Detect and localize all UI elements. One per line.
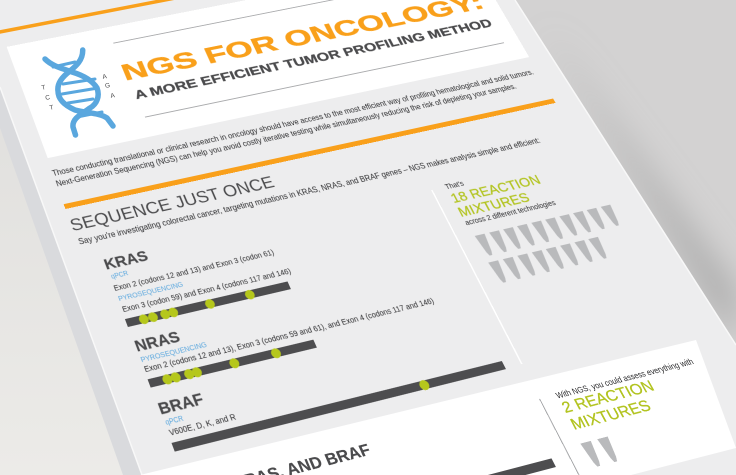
BRAF bar with mutation dot (171, 361, 506, 452)
KRAS qPCR text: Exon 2 (codons 12 and 13) and Exon 3 (codon 61) (113, 249, 276, 293)
mixtures headline: MIXTURES (567, 396, 654, 433)
NRAS heading: NRAS (132, 328, 182, 355)
header lower line (145, 42, 504, 118)
tubes: 18 reaction mixtures (474, 204, 619, 283)
section heading: SEQUENCE JUST ONCE (67, 173, 277, 235)
NRAS pyrosequencing label: PYROSEQUENCING (139, 340, 208, 364)
technologies note: across 2 different technologies (463, 199, 557, 227)
BRAF qPCR label: qPCR (164, 414, 185, 427)
intro text line 1: Those conducting translational or clinical research in oncology should have access to the most efficient way of profiling hematological and solid tumors. (51, 68, 535, 178)
KRAS pyrosequencing text: Exon 3 (codon 59) and Exon 4 (codons 117 and 146) (121, 267, 293, 314)
callout: 18 reaction mixtures (444, 172, 557, 227)
NRAS text: Exon 2 (codons 12 and 13), Exon 3 (codons 59 and 61), and Exon 4 (codons 117 and 146) (143, 297, 436, 374)
2 reaction headline: 2 REACTION (558, 377, 657, 416)
18 reaction headline: 18 REACTION (448, 172, 543, 206)
header panel (7, 0, 529, 158)
lead-in: That's (444, 180, 465, 191)
subtitle: A MORE EFFICIENT TUMOR PROFILING METHOD (132, 16, 495, 102)
lower panel bar (211, 458, 556, 475)
mixtures headline: MIXTURES (455, 190, 532, 220)
header upper line (113, 0, 464, 44)
icon: DNA helix with base letters: A (102, 73, 108, 81)
icon: DNA helix with base letters: C (45, 94, 51, 102)
BRAF text: V600E, D, K, and R (168, 413, 237, 438)
tubes: 2 reaction mixtures (580, 436, 618, 466)
KRAS qPCR label: qPCR (110, 269, 129, 280)
icon: DNA helix with base letters: T (41, 84, 46, 92)
column divider (431, 190, 522, 364)
icon: DNA helix with base letters: T (49, 104, 54, 112)
icon: DNA helix with base letters: G (104, 82, 111, 90)
KRAS heading: KRAS (102, 248, 150, 273)
NRAS bar with mutation dots (148, 340, 317, 388)
icon: DNA helix with base letters: A (110, 92, 116, 100)
KRAS bar with mutation dots (125, 281, 291, 327)
section intro: Say you're investigating colorectal cancer, targeting mutations in KRAS, NRAS, and BRAF genes – NGS makes analysis simple and efficient: (77, 137, 542, 246)
lead-in: With NGS, you could assess everything with (554, 357, 696, 401)
KRAS pyrosequencing label: PYROSEQUENCING (117, 280, 184, 302)
BRAF heading: BRAF (156, 390, 206, 418)
section orange rule (64, 99, 556, 209)
top orange rule (0, 0, 463, 37)
intro text line 2: Next-Generation Sequencing (NGS) can help you avoid costly iterative testing while simultaneously reducing the risk of depleting your samples. (55, 83, 518, 188)
callout: 2 reaction mixtures (554, 357, 696, 460)
lower panel divider (539, 399, 587, 475)
